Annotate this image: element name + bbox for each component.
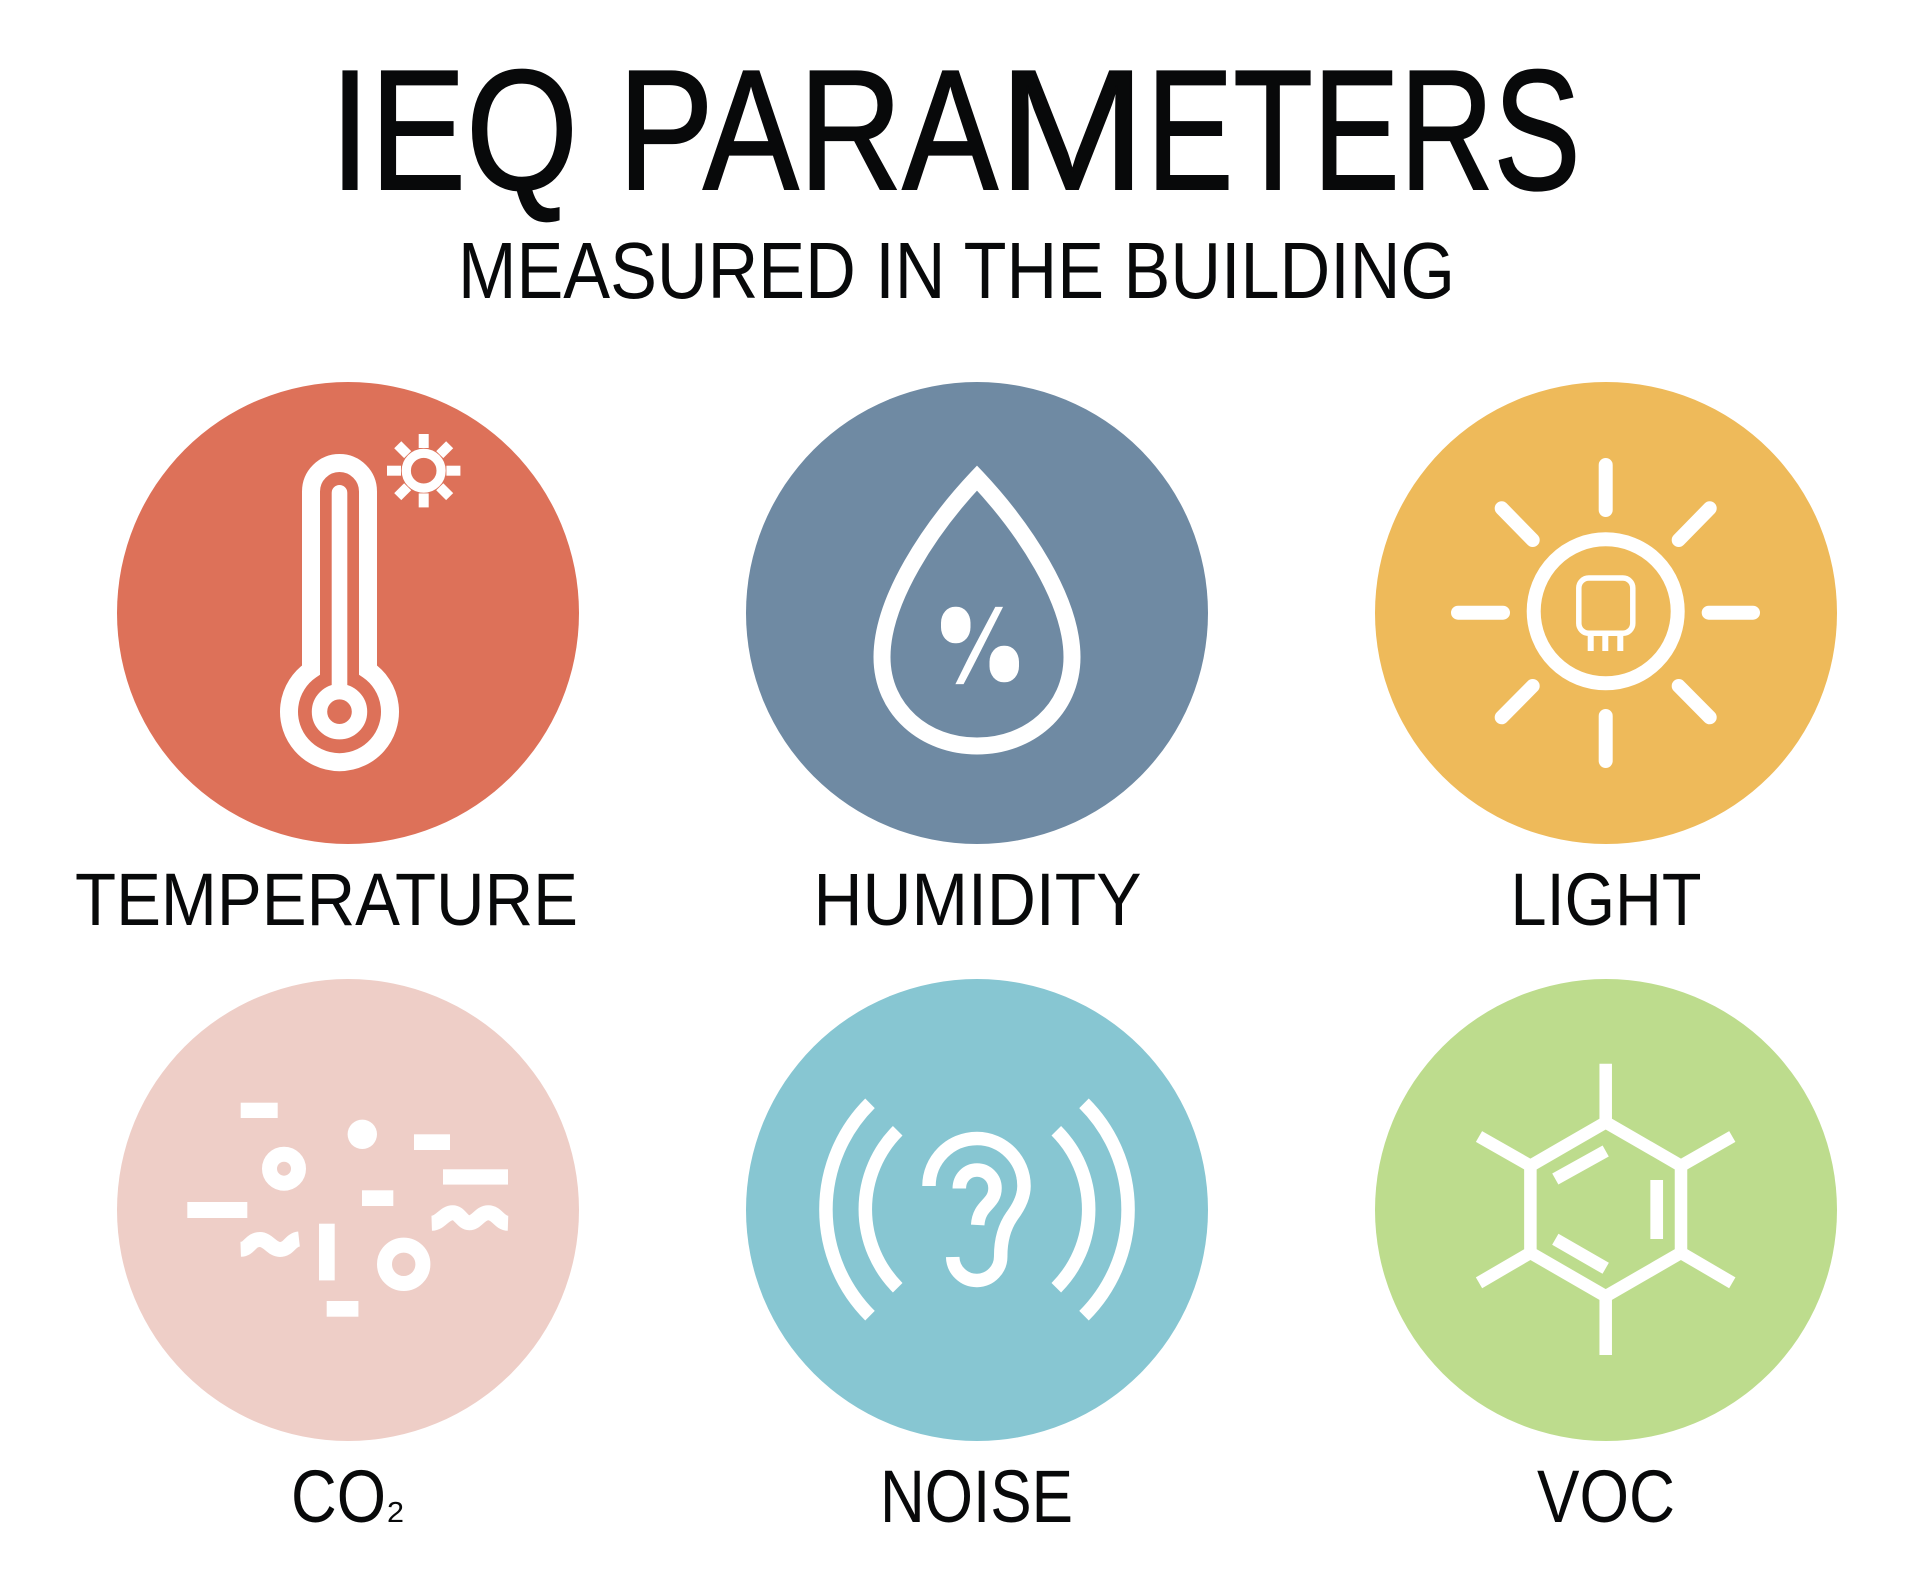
panel: humidity — [746, 382, 1208, 941]
label: voc: VOC — [1537, 1455, 1675, 1538]
icon: benzene molecule — [1479, 1064, 1732, 1355]
icon: particles — [187, 1103, 508, 1317]
icon: small sun — [387, 434, 460, 507]
percent sign: % — [939, 583, 1020, 708]
label: light: LIGHT — [1510, 858, 1702, 941]
title: M — [998, 35, 1146, 226]
label: co2: CO — [291, 1455, 386, 1538]
icon: water drop — [882, 478, 1072, 746]
title: IEQ — [330, 35, 578, 226]
voc circle — [1375, 979, 1837, 1441]
panel: co2 — [117, 979, 579, 1538]
icon: ear — [929, 1138, 1024, 1280]
label: noise: NOISE — [880, 1455, 1073, 1538]
icon: thermometer — [289, 463, 390, 762]
light circle — [1375, 382, 1837, 844]
title: ETERS — [1146, 35, 1580, 226]
co2 circle — [117, 979, 579, 1441]
percent sign — [941, 606, 1019, 684]
label: co2: 2 — [387, 1497, 404, 1529]
panel: noise — [746, 979, 1208, 1538]
noise circle — [746, 979, 1208, 1441]
panel: light — [1375, 382, 1837, 941]
subtitle: MEASURED IN THE BUILDING — [458, 226, 1455, 315]
label: humidity: HUMIDITY — [814, 858, 1142, 941]
label: temperature: TEMPERATURE — [75, 858, 578, 941]
panel: temperature — [75, 382, 579, 941]
humidity circle — [746, 382, 1208, 844]
panel: voc — [1375, 979, 1837, 1538]
icon: sound waves — [826, 1103, 1128, 1316]
temperature circle — [117, 382, 579, 844]
title: PARA — [618, 35, 998, 226]
icon: light sensor chip — [1579, 578, 1633, 651]
icon: sun rays — [1458, 465, 1753, 761]
